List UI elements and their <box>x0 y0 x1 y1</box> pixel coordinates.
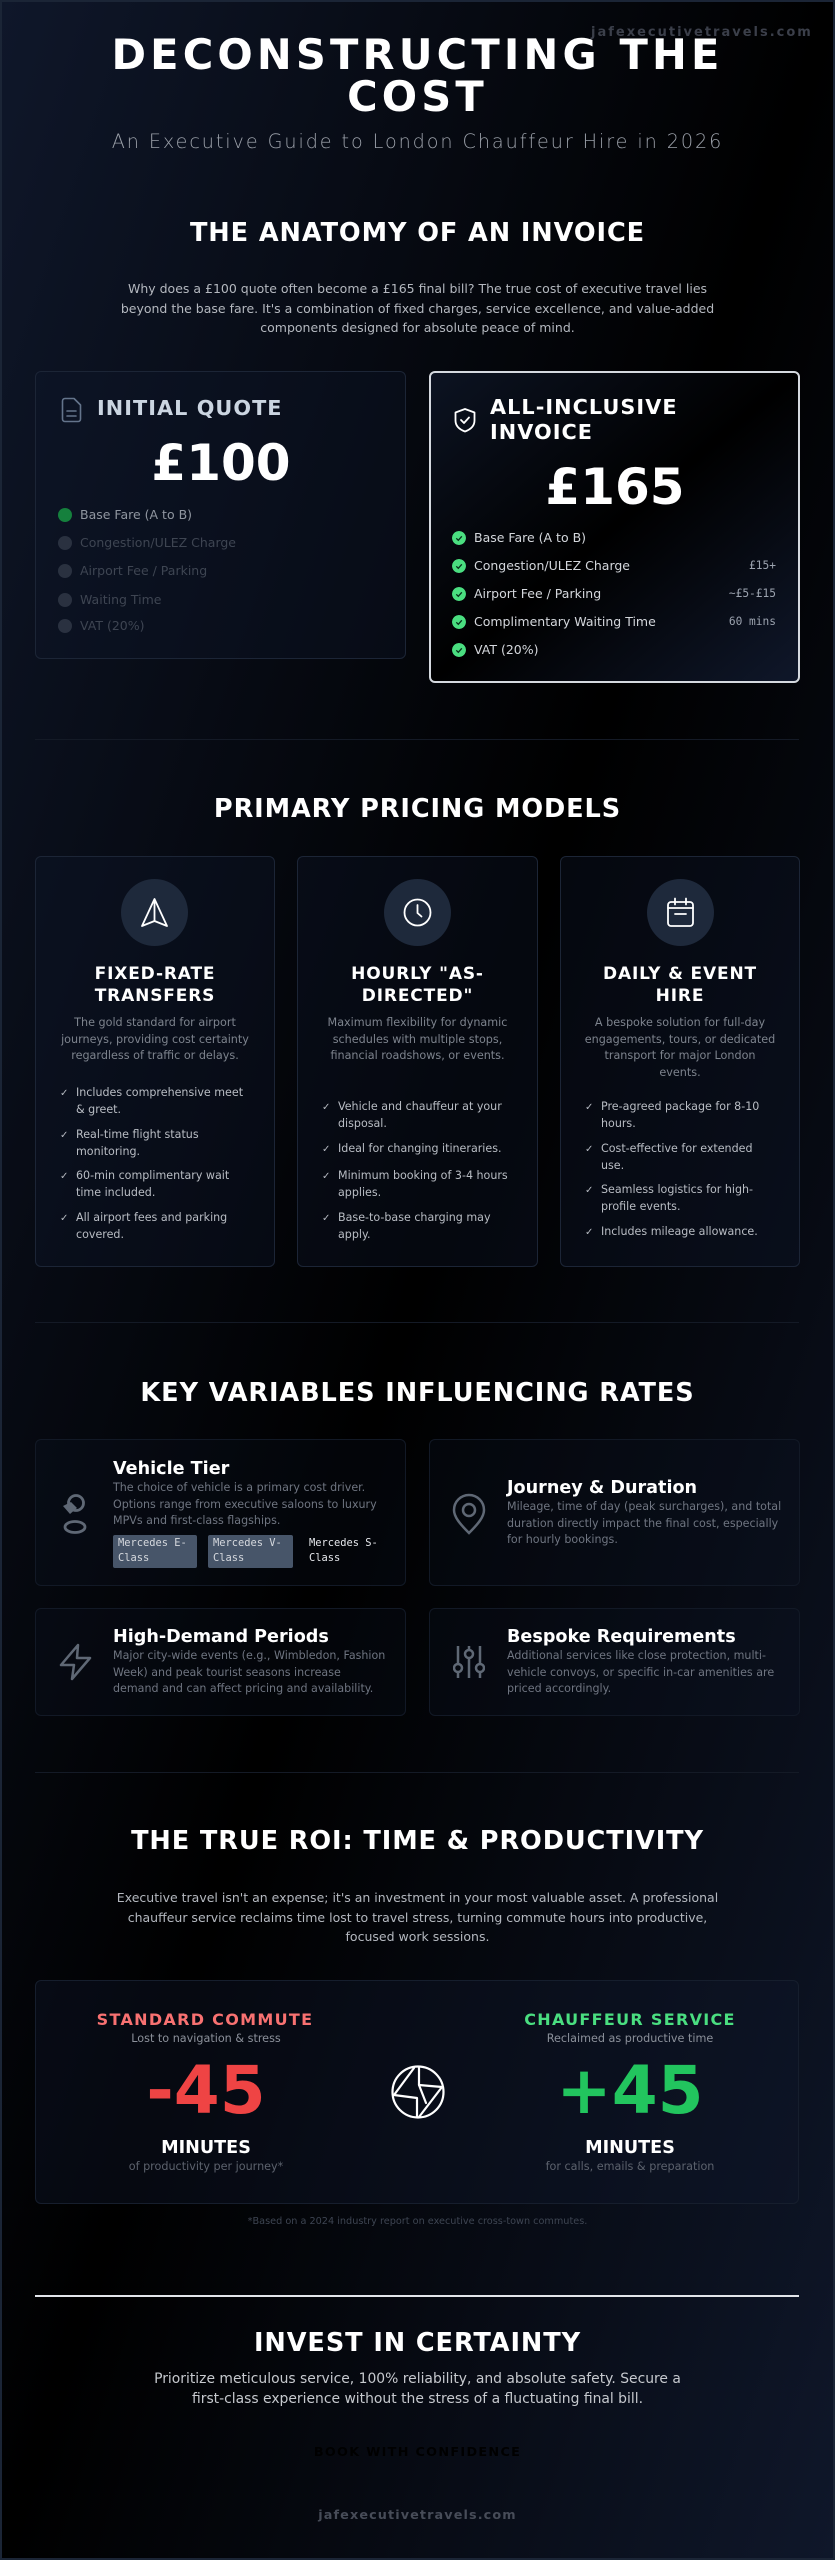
website label footer: jafexecutivetravels.com <box>318 2508 517 2523</box>
intro text: anatomy: Why does a £100 quote often become a £165 final bill? The true cost of executive travel lies <box>128 281 707 296</box>
benefit <box>322 1100 502 1130</box>
title: COST <box>347 72 488 121</box>
variable description <box>113 1481 377 1527</box>
closing text <box>0 2369 835 2409</box>
included item: Base Fare (A to B) <box>80 507 192 522</box>
included item: Congestion/ULEZ Charge <box>474 558 630 573</box>
plan description: financial roadshows, or events. <box>330 1049 505 1062</box>
panel: fixed-rate transfers: ✓ <box>60 1171 68 1182</box>
column note: Lost to navigation & stress <box>131 2032 281 2045</box>
plan title: HIRE <box>656 986 704 1006</box>
benefit: All airport fees and parking <box>76 1211 227 1224</box>
benefit <box>60 1086 243 1116</box>
variable description: Options range from executive saloons to luxury <box>113 1498 377 1511</box>
panel: daily and event hire: ✓ <box>585 1185 593 1196</box>
plan title: DIRECTED" <box>362 986 473 1006</box>
tag: s-class <box>309 1537 378 1564</box>
benefit: hours. <box>601 1117 636 1130</box>
intro text: anatomy: components designed for absolute peace of mind. <box>260 320 575 335</box>
panel: bespoke requirements <box>429 1608 800 1716</box>
panel: daily and event hire <box>560 856 800 1267</box>
icon: vehicle tier <box>63 1494 86 1534</box>
plan description: engagements, tours, or dedicated <box>585 1033 775 1046</box>
plan title: HOURLY "AS- <box>351 964 484 984</box>
plan description: A bespoke solution for full-day <box>595 1016 765 1029</box>
benefit <box>322 1169 508 1199</box>
card heading <box>490 395 678 444</box>
plan description: transport for major London <box>604 1049 756 1062</box>
panel: daily and event hire: ✓ <box>585 1102 593 1113</box>
benefit: Includes comprehensive meet <box>76 1086 243 1099</box>
panel: vehicle tier <box>35 1439 406 1586</box>
caption: of productivity per journey* <box>129 2160 283 2173</box>
panel: daily and event hire: ✓ <box>585 1227 593 1238</box>
panel: fixed-rate transfers <box>35 856 275 1267</box>
tag: e-class: Mercedes E- <box>118 1537 187 1549</box>
variable description: demand and can affect pricing and availability. <box>113 1682 373 1695</box>
excluded item: Congestion/ULEZ Charge <box>80 535 236 550</box>
icon: navigation arrow <box>121 879 188 946</box>
icon: map pin <box>452 1494 486 1535</box>
benefit: Pre-agreed package for 8-10 <box>601 1100 759 1113</box>
tag: e-class: Class <box>118 1552 149 1564</box>
benefit: & greet. <box>76 1103 121 1116</box>
heading: anatomy of an invoice: THE ANATOMY OF AN INVOICE <box>190 218 645 248</box>
plan title <box>351 964 484 1006</box>
variable description: The choice of vehicle is a primary cost driver. <box>113 1481 365 1494</box>
benefit: Base-to-base charging may <box>338 1211 491 1224</box>
plan title <box>94 964 215 1006</box>
benefit: Includes mileage allowance. <box>601 1225 758 1238</box>
panel: hourly as-directed: ✓ <box>322 1213 330 1224</box>
variable description: Major city-wide events (e.g., Wimbledon, Fashion <box>113 1649 385 1662</box>
tag: v-class <box>208 1535 293 1568</box>
intro text: roi: Executive travel isn't an expense; it's an investment in your most valuable asset. A professional <box>117 1890 718 1905</box>
panel: fixed-rate transfers: ✓ <box>60 1088 68 1099</box>
plan title <box>603 964 757 1006</box>
plan description: events. <box>659 1066 701 1079</box>
icon: document <box>62 398 82 422</box>
card heading: INITIAL QUOTE <box>97 396 283 420</box>
panel: initial quote <box>35 371 406 659</box>
plan description <box>60 1016 249 1062</box>
included item <box>452 558 776 573</box>
panel: fixed-rate transfers: ✓ <box>60 1130 68 1141</box>
button: book with confidence: BOOK WITH CONFIDENCE <box>314 2445 521 2460</box>
benefit: use. <box>601 1159 624 1172</box>
closing text: first-class experience without the stress of a fluctuating final bill. <box>192 2391 643 2407</box>
excluded item: VAT (20%) <box>80 618 144 633</box>
big number: +45 <box>556 2052 704 2129</box>
benefit: apply. <box>338 1228 370 1241</box>
icon: calendar <box>647 879 714 946</box>
plan title: FIXED-RATE <box>95 964 215 984</box>
variable description: for hourly bookings. <box>507 1533 618 1546</box>
variable description <box>507 1648 774 1698</box>
benefit <box>322 1211 491 1241</box>
plan description: schedules with multiple stops, <box>333 1033 502 1046</box>
icon: shield check <box>454 408 476 432</box>
variable title: Journey & Duration <box>507 1478 697 1498</box>
title <box>111 30 724 121</box>
website label top: jafexecutivetravels.com <box>591 25 813 40</box>
column note: Reclaimed as productive time <box>547 2032 713 2045</box>
benefit: Minimum booking of 3-4 hours <box>338 1169 508 1182</box>
panel: roi comparison <box>35 1980 799 2204</box>
included item: ~£5-£15 <box>729 587 776 600</box>
column heading: STANDARD COMMUTE <box>97 2010 313 2029</box>
unit: MINUTES <box>585 2138 675 2158</box>
benefit: time included. <box>76 1186 155 1199</box>
excluded item: Waiting Time <box>80 592 162 607</box>
closing text: Prioritize meticulous service, 100% reliability, and absolute safety. Secure a <box>154 2371 681 2387</box>
variable title: Vehicle Tier <box>113 1459 229 1479</box>
plan description <box>585 1016 775 1079</box>
benefit: monitoring. <box>76 1145 140 1158</box>
intro text: anatomy: beyond the base fare. It's a combination of fixed charges, service excellence, and value-added <box>121 300 714 316</box>
plan title: DAILY & EVENT <box>603 964 757 984</box>
benefit <box>585 1183 753 1213</box>
tag: s-class: Mercedes S- <box>309 1537 378 1549</box>
column heading: CHAUFFEUR SERVICE <box>524 2010 736 2029</box>
benefit: disposal. <box>338 1117 387 1130</box>
intro text: anatomy <box>121 281 714 335</box>
benefit <box>60 1211 227 1241</box>
variable title: Bespoke Requirements <box>507 1627 736 1647</box>
heading: primary pricing models: PRIMARY PRICING MODELS <box>214 794 621 824</box>
benefit: Vehicle and chauffeur at your <box>338 1100 502 1113</box>
benefit: Real-time flight status <box>76 1128 199 1141</box>
icon: lightning bolt <box>60 1644 92 1680</box>
price: £100 <box>151 434 291 492</box>
footnote: *Based on a 2024 industry report on executive cross-town commutes. <box>248 2216 587 2227</box>
benefit <box>60 1128 199 1158</box>
variable description: priced accordingly. <box>507 1682 611 1695</box>
included item: Complimentary Waiting Time <box>474 614 656 629</box>
benefit: covered. <box>76 1228 124 1241</box>
title: DECONSTRUCTING THE <box>111 30 724 79</box>
included item: Airport Fee / Parking <box>474 586 601 601</box>
subtitle: An Executive Guide to London Chauffeur Hire in 2026 <box>112 130 723 153</box>
heading: key variables: KEY VARIABLES INFLUENCING RATES <box>140 1378 695 1408</box>
included item <box>452 614 776 629</box>
unit: MINUTES <box>161 2138 251 2158</box>
variable description <box>507 1500 781 1546</box>
benefit: 60-min complimentary wait <box>76 1169 229 1182</box>
column: standard commute <box>36 1981 376 2203</box>
panel: all-inclusive invoice <box>429 371 800 683</box>
variable description: Additional services like close protection, multi- <box>507 1649 766 1662</box>
variable description: Week) and peak tourist seasons increase <box>113 1666 341 1679</box>
variable description <box>113 1649 385 1695</box>
variable description: Mileage, time of day (peak surcharges), and total <box>507 1500 781 1513</box>
card heading: INVOICE <box>490 420 593 444</box>
tag: e-class <box>113 1535 197 1568</box>
included item: VAT (20%) <box>474 642 538 657</box>
panel: high-demand periods <box>35 1608 406 1716</box>
benefit <box>585 1142 752 1172</box>
intro text: roi: chauffeur service reclaims time lost to travel stress, turning commute hours into productive, <box>128 1910 707 1924</box>
variable description: vehicle convoys, or specific in-car amenities are <box>507 1666 774 1679</box>
big number: -45 <box>146 2052 266 2129</box>
plan description <box>328 1016 507 1062</box>
plan title: TRANSFERS <box>95 986 215 1006</box>
panel: hourly as-directed <box>297 856 538 1267</box>
tag: v-class: Class <box>213 1552 244 1564</box>
icon: clock <box>384 879 451 946</box>
included item: Base Fare (A to B) <box>474 530 586 545</box>
tag: v-class: Mercedes V- <box>213 1537 282 1549</box>
variable title: High-Demand Periods <box>113 1627 329 1647</box>
panel: hourly as-directed: ✓ <box>322 1102 330 1113</box>
plan description: regardless of traffic or delays. <box>71 1049 239 1062</box>
heading: true roi: THE TRUE ROI: TIME & PRODUCTIVITY <box>131 1826 704 1856</box>
plan description: journeys, providing cost certainty <box>61 1033 249 1046</box>
intro text: roi <box>0 1888 835 1946</box>
plan description: The gold standard for airport <box>74 1016 236 1029</box>
price: £165 <box>545 458 685 516</box>
benefit <box>60 1169 229 1199</box>
variable description: MPVs and first-class flagships. <box>113 1514 280 1527</box>
variable description: duration directly impact the final cost, especially <box>507 1517 778 1530</box>
column: chauffeur service <box>460 1981 800 2203</box>
tag: s-class: Class <box>309 1552 340 1564</box>
intro text: roi: focused work sessions. <box>346 1929 489 1944</box>
benefit: applies. <box>338 1186 381 1199</box>
icon: sliders <box>453 1645 485 1679</box>
excluded item: Airport Fee / Parking <box>80 563 207 578</box>
heading: invest in certainty: INVEST IN CERTAINTY <box>254 2328 581 2358</box>
benefit: Seamless logistics for high- <box>601 1183 753 1196</box>
panel: hourly as-directed: ✓ <box>322 1171 330 1182</box>
panel: daily and event hire: ✓ <box>585 1144 593 1155</box>
icon: aperture <box>391 2065 445 2119</box>
included item: 60 mins <box>729 615 776 628</box>
benefit: Cost-effective for extended <box>601 1142 752 1155</box>
panel: hourly as-directed: ✓ <box>322 1144 330 1155</box>
benefit: Ideal for changing itineraries. <box>338 1142 502 1155</box>
plan description: Maximum flexibility for dynamic <box>328 1016 507 1029</box>
card heading: ALL-INCLUSIVE <box>490 395 678 419</box>
benefit <box>585 1100 759 1130</box>
panel: journey and duration <box>429 1439 800 1586</box>
caption: for calls, emails & preparation <box>546 2160 714 2173</box>
included item <box>452 586 776 601</box>
included item: £15+ <box>749 559 776 572</box>
benefit: profile events. <box>601 1200 680 1213</box>
panel: fixed-rate transfers: ✓ <box>60 1213 68 1224</box>
